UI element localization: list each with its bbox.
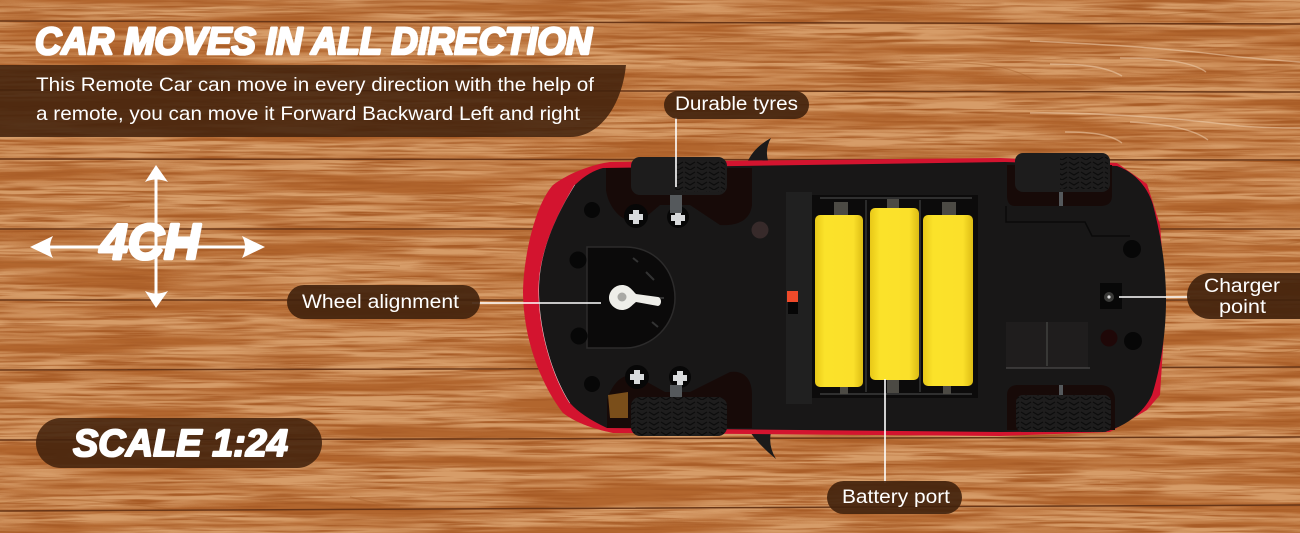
label: charger point: point	[1219, 297, 1267, 318]
scale text: SCALE 1:24	[73, 423, 288, 465]
chassis holes and screws	[570, 202, 1142, 392]
side bar and switch	[786, 192, 812, 404]
right chassis recess	[1006, 206, 1130, 368]
label: charger point: Charger	[1204, 276, 1281, 297]
white cross screws	[629, 210, 687, 385]
title: CAR MOVES IN ALL DIRECTION	[35, 21, 593, 63]
batteries	[815, 215, 863, 387]
description text: a remote, you can move it Forward Backward Left and right	[36, 103, 581, 125]
wheel alignment dial	[587, 247, 675, 348]
label: wheel alignment	[287, 285, 601, 319]
4CH direction arrows	[30, 165, 265, 308]
alignment knob	[609, 285, 661, 310]
description text	[36, 74, 595, 125]
description text: This Remote Car can move in every direction with the help of	[36, 74, 595, 96]
charger socket	[1100, 283, 1122, 309]
wheel wells	[606, 165, 1115, 430]
label: wheel alignment: Wheel alignment	[302, 292, 460, 313]
label: durable tyres	[664, 91, 809, 187]
description band	[0, 65, 626, 137]
side mirrors	[747, 138, 776, 459]
battery bay	[812, 195, 978, 398]
label: durable tyres: Durable tyres	[675, 94, 798, 115]
body highlight edge	[539, 185, 575, 403]
4CH label: 4CH	[99, 214, 201, 270]
red car body	[523, 158, 1166, 436]
tyres	[631, 153, 1111, 436]
springs and terminals	[834, 199, 956, 394]
black chassis	[539, 162, 1166, 432]
scale badge	[36, 418, 322, 468]
axle stubs	[670, 192, 1063, 397]
orange wiring in wheel well	[608, 392, 628, 418]
label: battery port	[827, 379, 962, 514]
remote car underside	[523, 138, 1166, 459]
label: battery port: Battery port	[842, 487, 951, 508]
label: charger point	[1119, 273, 1300, 319]
